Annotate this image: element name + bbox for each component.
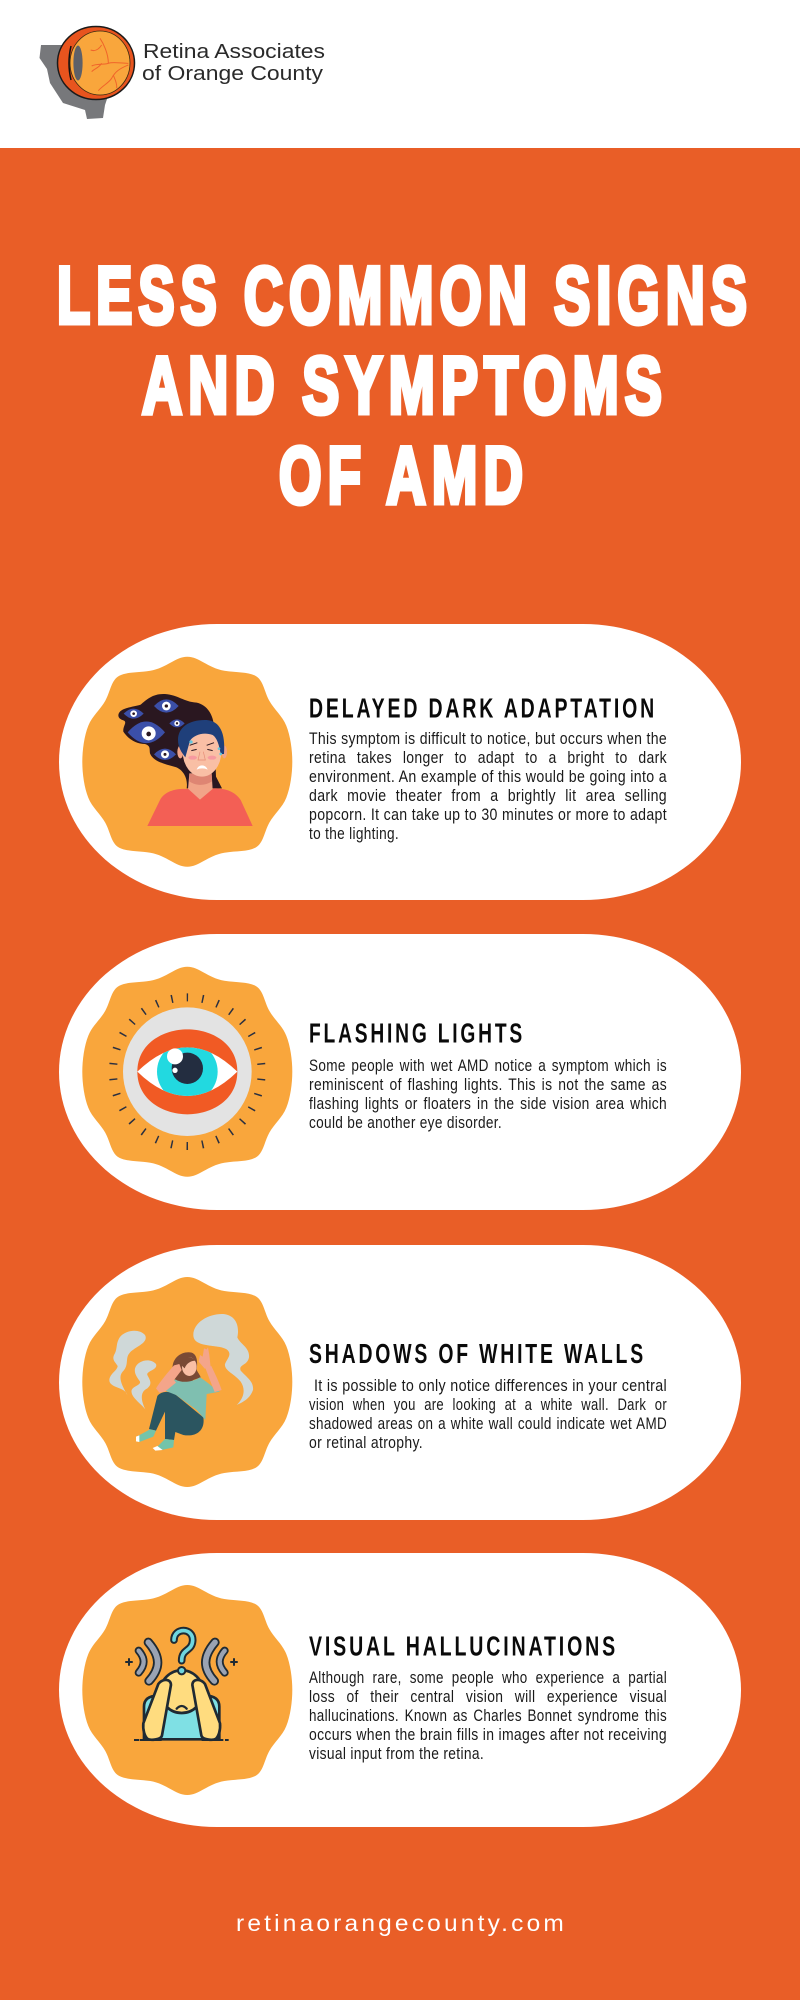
heading: delayed dark adaptation: DELAYED DARK ADAPTATION [309, 692, 657, 723]
logo wordmark: of Orange County [142, 63, 323, 85]
text: flashing lights body: flashing lights or floaters in the side vision area which [309, 1094, 667, 1113]
icon: woman with eyes in her hair [82, 657, 292, 867]
text: delayed dark adaptation body: dark movie theater from a brightly lit area selling [309, 786, 667, 805]
heading: flashing lights: FLASHING LIGHTS [309, 1018, 525, 1049]
text: delayed dark adaptation body: to the lighting. [309, 824, 399, 843]
footer url: retinaorangecounty.com [236, 1910, 567, 1936]
header band with logo [0, 0, 800, 148]
text: visual hallucinations body: hallucinations. Known as Charles Bonnet syndrome this [309, 1706, 667, 1725]
text: visual hallucinations body: loss of their central vision will experience visual [309, 1687, 667, 1706]
text: visual hallucinations body [309, 1668, 667, 1763]
text: flashing lights body: Some people with wet AMD notice a symptom which is [309, 1056, 667, 1075]
panel: visual hallucinations [59, 1553, 741, 1827]
icon: person holding head with question mark [82, 1585, 292, 1795]
text: flashing lights body: could be another eye disorder. [309, 1113, 502, 1132]
text: delayed dark adaptation body: environment. An example of this would be going into a [309, 767, 667, 786]
text: flashing lights body [309, 1056, 667, 1132]
panel: shadows of white walls [59, 1245, 741, 1520]
text: flashing lights body: reminiscent of flashing lights. This is not the same as [309, 1075, 667, 1094]
text: shadows of white walls body: vision when you are looking at a white wall. Dark or [309, 1395, 667, 1414]
heading: shadows of white walls: SHADOWS OF WHITE WALLS [309, 1338, 646, 1369]
text: delayed dark adaptation body: popcorn. It can take up to 30 minutes or more to adapt [309, 805, 667, 824]
text: delayed dark adaptation body [309, 729, 667, 843]
text: shadows of white walls body [309, 1376, 667, 1452]
text: visual hallucinations body: occurs when the brain fills in images after not receiving [309, 1725, 667, 1744]
text: delayed dark adaptation body: This symptom is difficult to notice, but occurs when the [309, 729, 667, 748]
icon: logo eye over California [40, 26, 134, 119]
text: shadows of white walls body: It is possible to only notice differences in your central [314, 1376, 667, 1395]
heading: visual hallucinations: VISUAL HALLUCINATIONS [309, 1631, 618, 1662]
logo wordmark [142, 41, 325, 85]
panel: delayed dark adaptation [59, 624, 741, 900]
logo wordmark: Retina Associates [143, 41, 325, 63]
text: shadows of white walls body: shadowed areas on a white wall could indicate wet AMD [309, 1414, 667, 1433]
text: visual hallucinations body: visual input from the retina. [309, 1744, 484, 1763]
text: visual hallucinations body: Although rare, some people who experience a partial [309, 1668, 667, 1687]
icon: eye with radiating ticks [82, 967, 292, 1177]
title: OF AMD [279, 431, 529, 521]
panel: flashing lights [59, 934, 741, 1210]
title [57, 251, 753, 521]
text: delayed dark adaptation body: retina takes longer to adapt to a bright to dark [309, 748, 667, 767]
icon: woman among smoke shapes [82, 1277, 292, 1487]
text: shadows of white walls body: or retinal atrophy. [309, 1433, 423, 1452]
